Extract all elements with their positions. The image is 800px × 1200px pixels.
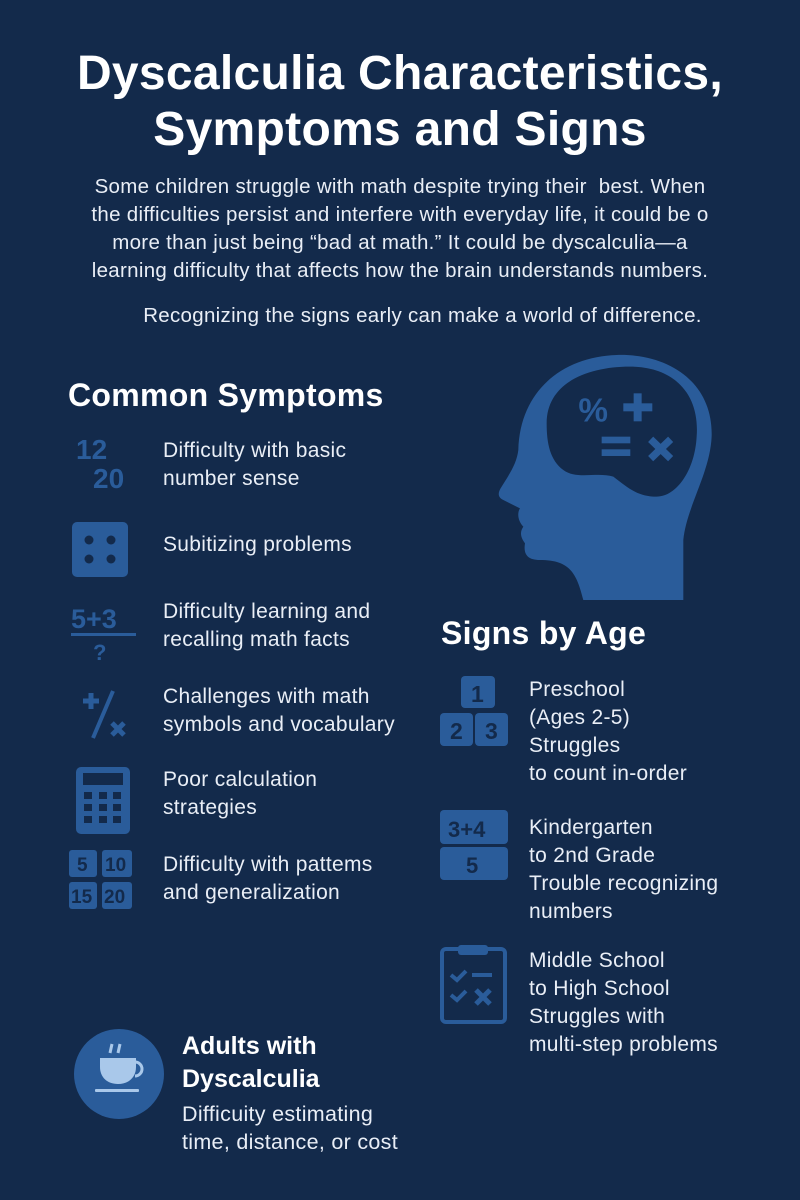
intro text — [91, 175, 709, 282]
icon: calculator — [76, 767, 130, 834]
icon: patterns grid: 20 — [104, 887, 125, 908]
text: symbols: Challenges with math — [163, 685, 370, 708]
text: kindergarten: Trouble recognizing — [529, 872, 718, 895]
text: kindergarten: to 2nd Grade — [529, 844, 655, 867]
icon: symbols — [83, 690, 126, 739]
text: patterns: and generalization — [163, 881, 340, 904]
icon: 5+3: ? — [93, 640, 106, 665]
icon: blocks 1 2 3 — [440, 676, 508, 746]
title: Symptoms and Signs — [153, 103, 647, 156]
text: kindergarten: Kindergarten — [529, 816, 653, 839]
intro text: Some children struggle with math despite trying their best. When — [95, 175, 705, 198]
text: calculation — [163, 768, 317, 819]
title: Dyscalculia Characteristics, — [77, 47, 723, 100]
icon: 5+3: 5+3 — [71, 604, 117, 634]
icon: dice — [72, 522, 128, 577]
text: kindergarten — [529, 816, 718, 923]
text: middle school: to High School — [529, 977, 670, 1000]
text: calculation: strategies — [163, 796, 257, 819]
text: preschool: (Ages 2-5) — [529, 706, 630, 729]
icon: 3+4 / 5 — [440, 810, 508, 880]
icon: clipboard — [440, 945, 507, 1024]
icon: 3+4 / 5: 5 — [466, 853, 478, 878]
icon: blocks 1 2 3: 2 — [450, 718, 463, 744]
panel: signs by age — [440, 676, 718, 1056]
text: patterns — [163, 853, 373, 904]
intro text: more than just being “bad at math.” It could be dyscalculia—a — [112, 231, 688, 254]
text: number sense — [163, 439, 346, 490]
text: adults: Difficuity estimating — [182, 1102, 373, 1126]
icon: head with brain — [498, 354, 712, 600]
heading: adults: Dyscalculia — [182, 1065, 320, 1093]
icon: head with brain: % — [578, 393, 608, 430]
icon: blocks 1 2 3: 1 — [471, 681, 484, 707]
text: math facts: Difficulty learning and — [163, 600, 370, 623]
icon: 5+3 — [71, 604, 136, 665]
icon: patterns grid: 15 — [71, 887, 93, 908]
icon: 3+4 / 5: 3+4 — [448, 817, 486, 842]
text: symbols — [163, 685, 395, 736]
text: subitizing: Subitizing problems — [163, 533, 352, 556]
icon: coffee cup circle — [74, 1029, 164, 1119]
text: middle school: Middle School — [529, 949, 665, 972]
text: number sense: number sense — [163, 467, 300, 490]
intro tagline: Recognizing the signs early can make a world of difference. — [143, 304, 702, 327]
text: symbols: symbols and vocabulary — [163, 713, 395, 736]
text: preschool: to count in-order — [529, 762, 687, 785]
heading: common symptoms: Common Symptoms — [68, 377, 384, 413]
text: number sense: Difficulty with basic — [163, 439, 346, 462]
text: adults: time, distance, or cost — [182, 1130, 398, 1154]
icon: 12 20: 20 — [93, 463, 124, 494]
text: math facts: recalling math facts — [163, 628, 350, 651]
title — [77, 47, 723, 156]
panel: adults — [182, 1032, 398, 1154]
text: middle school — [529, 949, 718, 1056]
text: calculation: Poor calculation — [163, 768, 317, 791]
text: preschool: Preschool — [529, 678, 625, 701]
text: preschool — [529, 678, 687, 785]
text: math facts — [163, 600, 370, 651]
text: middle school: multi-step problems — [529, 1033, 718, 1056]
icon: patterns grid: 10 — [105, 855, 126, 876]
text: preschool: Struggles — [529, 734, 620, 757]
text: patterns: Difficulty with pattems — [163, 853, 373, 876]
text: kindergarten: numbers — [529, 900, 613, 923]
text: middle school: Struggles with — [529, 1005, 665, 1028]
icon: 12 20: 12 — [76, 434, 107, 465]
icon: 12 20 — [76, 434, 124, 494]
intro text: learning difficulty that affects how the brain understands numbers. — [92, 259, 708, 282]
heading: adults: Adults with — [182, 1032, 317, 1060]
icon: patterns grid: 5 — [77, 855, 88, 876]
icon: blocks 1 2 3: 3 — [485, 718, 498, 744]
heading: adults — [182, 1032, 320, 1093]
icon: patterns grid — [69, 850, 132, 909]
panel: symptoms list — [69, 434, 395, 909]
heading: signs by age: Signs by Age — [441, 615, 646, 651]
text: adults — [182, 1102, 398, 1154]
intro text: the difficulties persist and interfere with everyday life, it could be o — [91, 203, 709, 226]
